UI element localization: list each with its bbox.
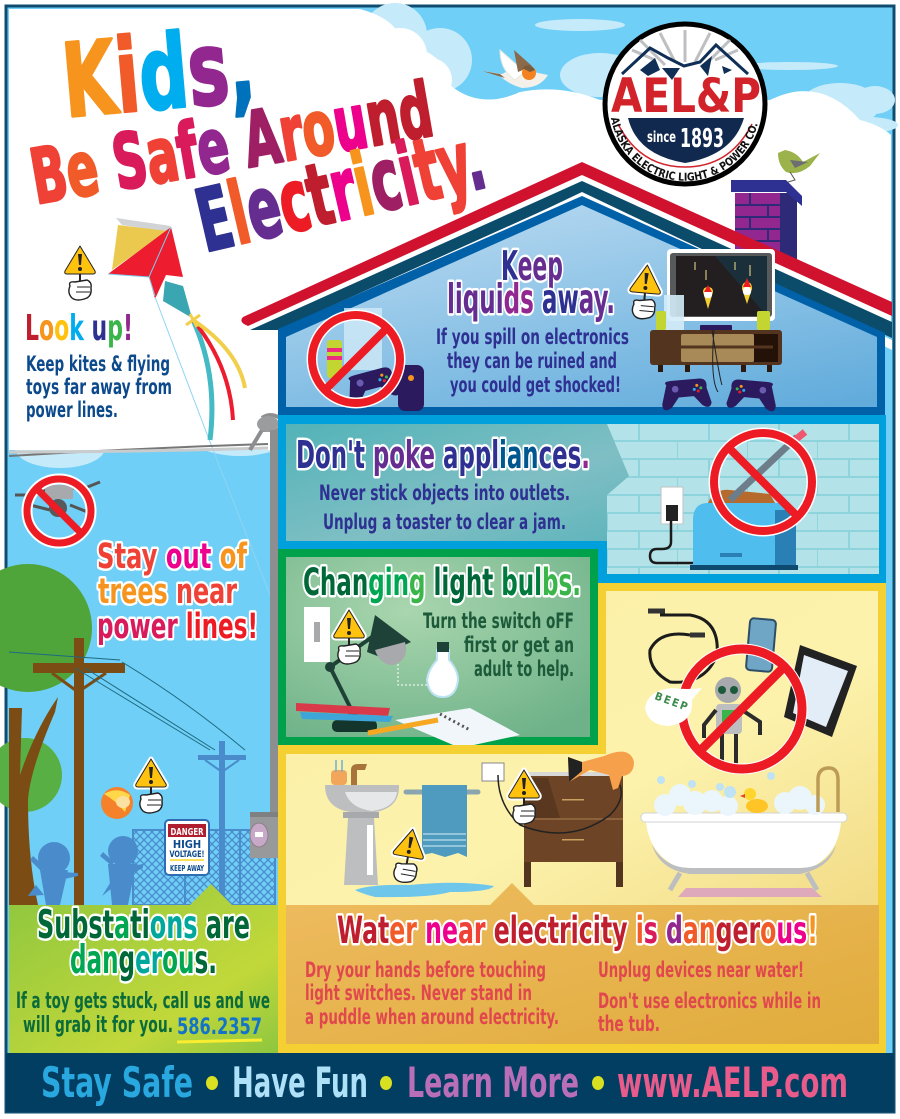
title [24,7,494,272]
sign: danger high voltage: KEEP AWAY [170,864,204,873]
body: keep kites away: toys far away from [26,375,172,399]
body: turn the switch off [423,609,574,681]
illustration: toaster and outlet [650,432,812,570]
heading: substations are dangerous: Substations are [37,903,250,948]
body: call us: will grab it for you. [23,1013,173,1038]
logo: AEL&P: ALASKA ELECTRIC LIGHT & POWER CO. [610,118,758,181]
icon: no poking [714,433,812,531]
body: unplug devices [598,958,821,1036]
illustration: bathtub, bubbles, duck, rug [641,768,847,897]
footer: dot [380,1076,392,1090]
clouds background [9,3,898,468]
electric meter [250,812,283,858]
icon: warning hand (ball) [136,759,166,813]
heading: keep liquids away: liquids away. [447,275,615,323]
icon: no liquids near controllers [312,308,424,411]
body: keep kites away: Keep kites & flying [26,352,170,376]
icon: no devices [682,649,802,769]
footer: dot [592,1076,604,1090]
body: dry your hands: Dry your hands before touching [305,958,546,982]
body: never stick objects [319,481,570,534]
heading: water near electricity: Water near electricity is dangerous! [337,909,818,952]
body: keep kites away [26,352,172,422]
heading: substations are dangerous [37,903,250,983]
body: never stick objects: Never stick objects into outlets. [319,481,570,505]
body: unplug devices: the tub. [598,1012,660,1036]
body: turn the switch off: Turn the switch oFF [423,609,574,633]
illustration: desk lamp, bulb, books, drawing [296,607,520,748]
icon: silhouettes of children [28,836,143,905]
text: stay out of trees: trees near [98,572,237,612]
text: Look up [25,308,172,422]
heading: changing light bulbs: Changing light bulbs. [303,561,581,604]
heading: keep liquids away [447,242,615,323]
icon: warning hand (kite) [65,246,95,300]
title line: Be Safe Around: Be Safe Around [24,65,439,222]
illustration: dresser, outlet, hair dryer [482,752,634,887]
footer [6,1053,894,1112]
icon: kite [108,218,272,600]
house roof [241,162,892,350]
street lamp pole [270,430,278,815]
heading: Look up: Look up! [25,308,133,349]
icon: no drones [15,479,100,543]
body: dry your hands [305,958,559,1029]
speech bubble: beep [645,688,702,726]
icon: warning hand (dresser) [509,770,539,824]
sign: danger high voltage: HIGH [173,838,201,851]
heading: don't poke appliances: Don't poke appliances. [296,433,590,477]
sign: danger high voltage: VOLTAGE! [170,850,204,860]
logo: AEL&P: since [647,128,676,146]
icon: warning hand (lamp) [334,610,364,664]
logo: AEL&P [602,22,768,186]
panel: substations [9,884,278,1053]
panel: don't poke appliances [278,415,886,583]
body: unplug devices: Unplug devices near water! [598,958,804,982]
body: call us: 586.2357 [177,1015,262,1040]
panel: changing light bulbs [278,549,598,745]
title line: Electricity: Electricity. [187,109,494,272]
panel: water near electricity [278,591,886,1053]
panel: unplugged devices [598,583,886,753]
icon: warning hand (sink) [388,827,428,885]
illustration: sink, towel, puddle [325,760,494,897]
footer: stay safe: Stay Safe [41,1058,193,1107]
body: spill on electronics: If you spill on electronics [436,325,629,349]
body: dry your hands: light switches. Never stand in [305,981,532,1005]
footer: dot [206,1076,218,1090]
text: stay out of trees [97,537,258,647]
body: spill on electronics: they can be ruined and [447,349,617,373]
logo: AEL&P: AEL&P [611,69,761,124]
sign: danger high voltage [165,820,209,875]
chimney with bird [731,150,820,263]
text: stay out of trees: Stay out of [97,537,247,577]
illustration: cable, phone, tablet, robot [645,611,857,769]
heading: substations are dangerous: dangerous. [70,938,217,983]
footer: learn more: Learn More [407,1058,579,1107]
logo: AEL&P: 1893 [680,124,724,154]
body: spill on electronics: you could get shocked! [450,373,621,397]
body: turn the switch off: adult to help. [474,657,574,681]
body: keep kites away: power lines. [26,398,118,422]
panel: keep liquids away [278,196,885,415]
icon: warning hand (liquids) [627,264,663,320]
body: spill on electronics [436,325,629,397]
icon: beach ball [101,787,133,819]
body: call us: If a toy gets stuck, call us and we [16,989,270,1014]
body: turn the switch off: first or get an [464,633,574,657]
sign: danger high voltage: DANGER [170,827,204,838]
illustration: substation fence and blue pole [133,741,275,905]
speech bubble: beep: BEEP [653,690,689,713]
illustration: TV, cabinet and controllers [650,249,782,412]
illustration: trees and wooden pole [0,564,245,905]
body: call us [16,989,270,1040]
text: stay out of trees: power lines! [97,607,258,647]
title line: Kids: Kids, [58,7,259,142]
body: never stick objects: Unplug a toaster to clear a jam. [323,510,566,534]
body: dry your hands: a puddle when around electricity. [305,1005,559,1029]
power lines from street pole [9,415,280,456]
heading: keep liquids away: Keep [501,242,563,290]
icon: flying bird [482,50,548,88]
footer: have fun: Have Fun [232,1058,368,1107]
